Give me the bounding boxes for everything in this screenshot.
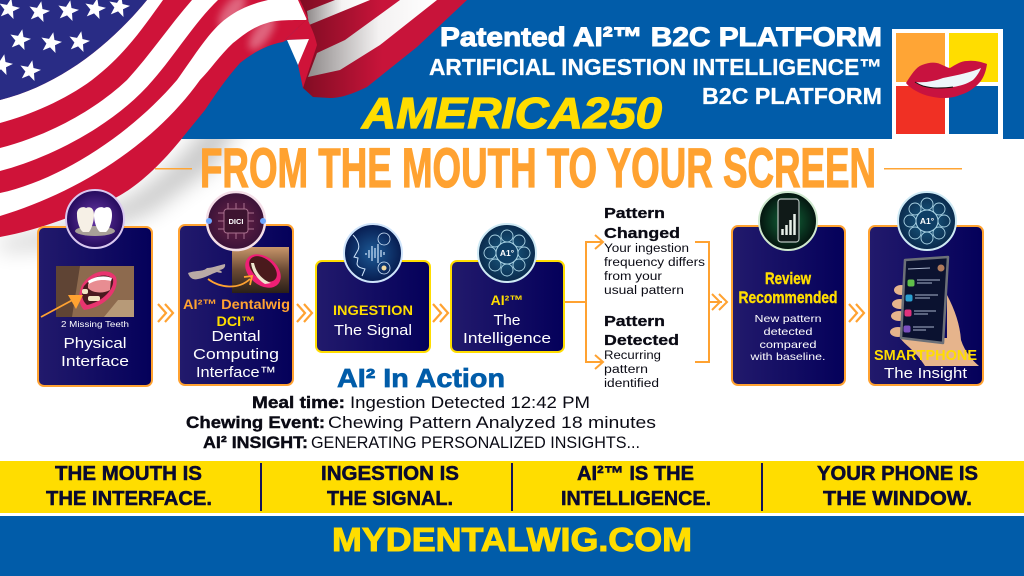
panel: smartphone insight <box>869 226 983 385</box>
panel: ingestion signal: INGESTION <box>333 302 413 318</box>
panel: review recommended: detected <box>764 326 813 338</box>
text block: pattern detected: Pattern <box>604 313 665 330</box>
flag back fold <box>298 0 467 98</box>
icon: teeth on plate <box>66 190 124 248</box>
panel: review recommended: Recommended <box>738 288 838 307</box>
icon: AI mandala <box>478 224 536 282</box>
panel: dentalwig DCI: Computing <box>193 346 279 363</box>
slogan: mouth is the interface: THE INTERFACE. <box>46 488 212 510</box>
icon: AI mandala: A1° <box>500 248 515 258</box>
panel: ingestion signal: The Signal <box>334 322 412 339</box>
footer blue band <box>0 516 1024 576</box>
slogan: AI is the intelligence: INTELLIGENCE. <box>561 488 711 510</box>
text block: pattern changed: from your <box>604 271 662 283</box>
website URL: MYDENTALWIG.COM <box>332 521 692 558</box>
panel: physical interface: 2 Missing Teeth <box>61 319 129 329</box>
panel: physical interface: Interface <box>61 353 129 370</box>
header heading lines <box>429 22 882 109</box>
text block: AI in action details: Ingestion Detected 12:42 PM <box>350 394 590 412</box>
text block: AI in action details: AI² INSIGHT: <box>203 434 308 452</box>
slogan: ingestion is the signal <box>321 463 459 510</box>
text block: pattern detected: Recurring <box>604 350 661 362</box>
slogan: mouth is the interface: THE MOUTH IS <box>55 463 202 485</box>
text block: AI in action details: Chewing Pattern Analyzed 18 minutes <box>328 414 656 432</box>
panel: review recommended: compared <box>760 339 817 351</box>
canton stars <box>0 0 132 82</box>
panel: review recommended: New pattern <box>754 313 822 325</box>
slogan: mouth is the interface <box>46 463 212 510</box>
text block: AI in action details: GENERATING PERSONALIZED INSIGHTS... <box>311 434 640 452</box>
slogan: phone is the window: YOUR PHONE IS <box>817 463 978 485</box>
panel: AI intelligence: The <box>494 312 520 329</box>
panel: physical interface <box>38 227 152 386</box>
icon: voice signal <box>344 224 402 282</box>
header heading lines: ARTIFICIAL INGESTION INTELLIGENCE™ <box>429 54 882 80</box>
panel: dentalwig DCI: DCI™ <box>216 313 256 329</box>
slogan: AI is the intelligence <box>561 463 711 510</box>
slogan: ingestion is the signal: THE SIGNAL. <box>327 488 453 510</box>
text block: pattern detected: Detected <box>604 332 679 349</box>
panel: dentalwig DCI <box>179 225 293 385</box>
panel: review recommended: Review <box>765 269 812 288</box>
flag front stripes <box>0 0 308 237</box>
flag shadow <box>0 139 241 258</box>
text block: pattern detected: identified <box>604 378 659 390</box>
panel: review recommended: with baseline. <box>749 351 826 363</box>
icon: phone bars <box>759 192 817 250</box>
text block: pattern changed <box>604 205 705 297</box>
text block: pattern detected: pattern <box>604 364 648 376</box>
arrow: ingestion to intelligence <box>433 304 448 322</box>
text block: AI in action details: Chewing Event: <box>186 414 325 432</box>
panel: smartphone insight: The Insight <box>884 365 968 382</box>
slogan: phone is the window: THE WINDOW. <box>823 488 972 510</box>
panel: dentalwig DCI: Interface™ <box>196 364 276 381</box>
header heading lines: B2C PLATFORM <box>702 83 882 109</box>
photo: open mouth <box>232 247 289 295</box>
icon: dental appliance <box>188 264 225 279</box>
slogan: ingestion is the signal: INGESTION IS <box>321 463 459 485</box>
text block: pattern changed: Changed <box>604 225 680 242</box>
text block: pattern changed: Your ingestion <box>604 243 689 255</box>
photo: missing teeth <box>41 266 134 317</box>
panel: AI intelligence <box>451 261 564 352</box>
text block: pattern changed: usual pattern <box>604 285 684 297</box>
icon: DICI chip <box>206 192 266 250</box>
panel: review recommended <box>732 226 845 385</box>
panel: dentalwig DCI: AI²™ Dentalwig <box>183 296 290 312</box>
panel: smartphone insight: SMARTPHONE <box>874 347 977 364</box>
slogan: AI is the intelligence: AI²™ IS THE <box>577 463 694 485</box>
text block: pattern changed: frequency differs <box>604 257 705 269</box>
American flag <box>0 0 467 237</box>
logo <box>892 29 1003 140</box>
panel: dentalwig DCI: Dental <box>212 328 260 345</box>
text block: pattern changed: Pattern <box>604 205 665 222</box>
icon: AI mandala insight: A1° <box>920 216 935 226</box>
arrow: review to insight <box>849 304 864 322</box>
text block: pattern detected <box>604 313 679 390</box>
heading: AI2 in action: AI² In Action <box>337 363 505 393</box>
text block: AI in action details <box>186 394 656 452</box>
arrow: DCI to ingestion <box>297 304 312 322</box>
fold red strip <box>283 0 317 88</box>
arrow: appliance to mouth <box>208 276 252 287</box>
icon: DICI chip: DICI <box>228 217 244 226</box>
fold white corner <box>287 39 309 65</box>
panel: ingestion signal <box>316 261 430 352</box>
arrow: physical to DCI <box>158 304 173 322</box>
panel: AI intelligence: AI²™ <box>491 292 523 308</box>
icon: AI mandala insight <box>898 192 956 250</box>
panel: physical interface: Physical <box>64 335 126 352</box>
panel: AI intelligence: Intelligence <box>463 330 551 347</box>
yellow slogan band <box>0 461 1024 513</box>
header blue band <box>0 0 1024 139</box>
header heading lines: Patented AI²™ B2C PLATFORM <box>440 22 882 52</box>
text block: AI in action details: Meal time: <box>252 394 345 412</box>
slogan: phone is the window <box>817 463 978 510</box>
connector: bracket to review panel <box>695 242 727 362</box>
connector: branching bracket to patterns <box>565 235 603 369</box>
AMERICA250 label: AMERICA250 <box>361 89 663 138</box>
illustration: hand holding phone <box>890 257 979 366</box>
